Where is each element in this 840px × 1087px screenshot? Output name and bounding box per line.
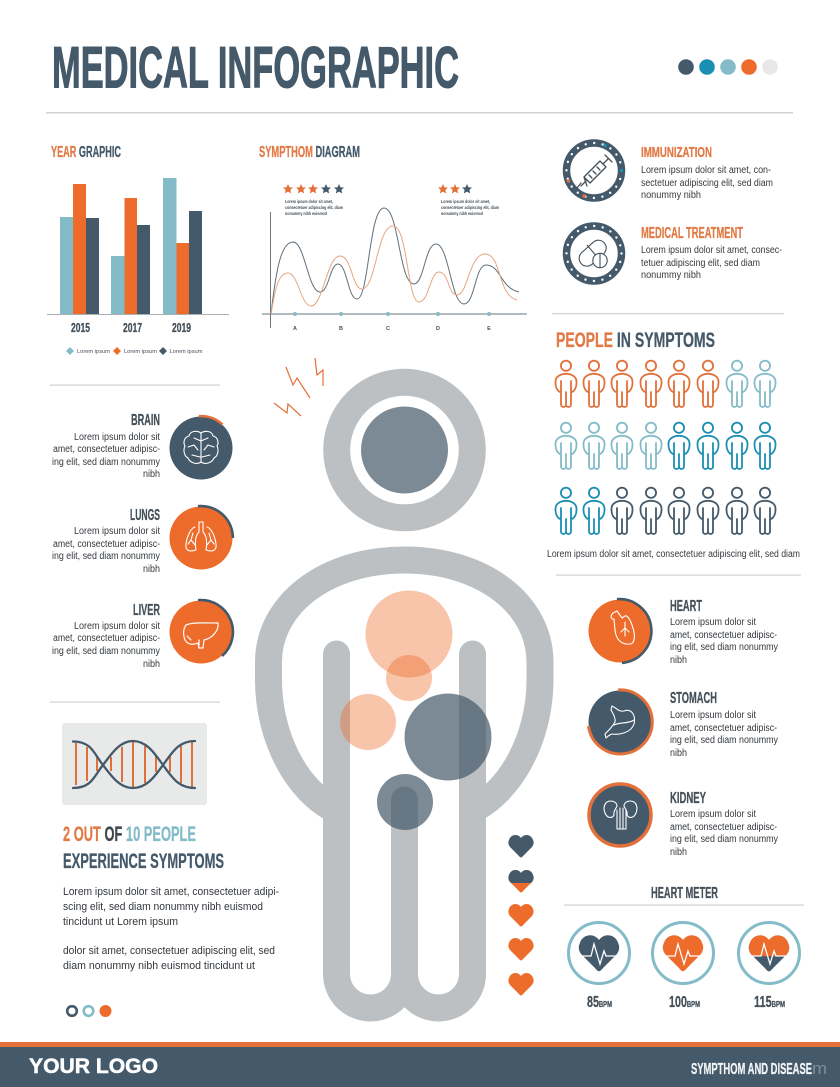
bar chart: 2019 [172, 321, 191, 335]
text: dna body [63, 886, 279, 972]
panel: liver [52, 600, 233, 670]
footer [0, 1042, 840, 1087]
readout: 115 bpm: 115BPM [754, 994, 785, 1011]
chart caption right: Lorem ipsum dolor sit amet, [441, 199, 490, 204]
gauge: 100 bpm [652, 922, 714, 984]
legend: Lorem ipsum [124, 349, 157, 355]
text: kidney: ing elit, sed diam nonummy [670, 834, 778, 845]
chart caption right: consectetuer adipiscing elit, diam [441, 205, 499, 210]
chart caption left: Lorem ipsum dolor sit amet, [285, 199, 333, 204]
line chart: D [436, 326, 440, 332]
panel: year graphic [47, 144, 229, 355]
caption: people: Lorem ipsum dolor sit amet, consectetuer adipiscing elit, sed diam [547, 549, 800, 560]
text: stomach: amet, consectetuer adipisc- [670, 723, 777, 734]
icon: pills [566, 226, 622, 281]
heading: brain: BRAIN [131, 412, 160, 429]
icon: lungs [170, 506, 233, 570]
icon: lightning bolts [274, 358, 323, 416]
chart caption left: consectetuer adipiscing elit, diam [285, 205, 343, 210]
text: kidney [670, 809, 778, 858]
text: immunization [641, 165, 773, 201]
text: kidney: Lorem ipsum dolor sit [670, 809, 756, 820]
body outline [268, 382, 540, 1008]
text: liver: nibh [143, 659, 160, 670]
text: medical treatment: Lorem ipsum dolor sit amet, consec- [641, 245, 782, 256]
title: MEDICAL INFOGRAPHIC [52, 36, 459, 100]
panel: heart meter [564, 885, 804, 1011]
human body figure [268, 382, 540, 1008]
icon: liver [170, 600, 233, 664]
text: kidney: nibh [670, 847, 687, 858]
heading: liver: LIVER [133, 602, 160, 619]
heading: stomach: STOMACH [670, 690, 717, 707]
panel: symptom diagram [259, 144, 527, 332]
text: heart: ing elit, sed diam nonummy [670, 642, 778, 653]
text: lungs: nibh [143, 564, 160, 575]
text: medical treatment [641, 245, 782, 281]
icon: stomach [588, 690, 652, 754]
pictogram row 3 [556, 488, 776, 534]
text: liver [52, 621, 160, 670]
palette dots [678, 59, 778, 75]
line chart: C [386, 326, 390, 332]
heading: heart meter: HEART METER [651, 885, 718, 902]
text: dna body: scing elit, sed diam nonummy nibh euismod [63, 901, 263, 913]
pictogram row 2 [556, 423, 776, 469]
text: lungs: amet, consectetuer adipisc- [53, 539, 160, 550]
text: dna body: diam nonummy nibh euismod tincidunt ut [63, 960, 256, 972]
line chart: E [487, 326, 491, 332]
panel: lungs [52, 506, 233, 575]
heading: 2 out of 10 people: 2 OUT OF 10 PEOPLE [63, 822, 196, 846]
heading: heart: HEART [670, 598, 702, 615]
organ markers [340, 406, 492, 830]
icon: dna helix [62, 723, 207, 805]
bar chart: 2017 [123, 321, 142, 335]
readout: 100 bpm: 100BPM [669, 994, 700, 1011]
heading: immunization: IMMUNIZATION [641, 144, 712, 161]
text: immunization: nonummy nibh [641, 190, 701, 201]
text: dna body: dolor sit amet, consectetuer adipiscing elit, sed [63, 945, 275, 957]
text: heart: amet, consectetuer adipisc- [670, 630, 777, 641]
text: stomach: ing elit, sed diam nonummy [670, 735, 778, 746]
rating stars right [438, 184, 472, 193]
text: medical treatment: nonummy nibh [641, 270, 701, 281]
heading: lungs: LUNGS [130, 507, 160, 524]
heading: kidney: KIDNEY [670, 790, 706, 807]
text: lungs [52, 526, 160, 575]
legend: Lorem ipsum [170, 349, 203, 355]
text: brain: nibh [143, 469, 160, 480]
readout: 85 bpm: 85BPM [587, 994, 612, 1011]
line chart [262, 208, 527, 332]
icon: heart organ [588, 599, 652, 663]
panel: kidney [589, 784, 778, 858]
panel: people in symptoms [547, 328, 800, 560]
heart rating column [508, 835, 534, 996]
chart caption right: nonummy nibh euismod [441, 211, 483, 216]
text: stomach [670, 710, 778, 759]
pagination dots [67, 1005, 112, 1017]
text: immunization: Lorem ipsum dolor sit amet, con- [641, 165, 771, 176]
icon: syringe [566, 143, 623, 198]
footer watermark letter: m [812, 1059, 827, 1078]
text: brain: Lorem ipsum dolor sit [74, 432, 160, 443]
text: liver: ing elit, sed diam nonummy [52, 646, 160, 657]
text: liver: Lorem ipsum dolor sit [74, 621, 160, 632]
heading: year graphic: YEAR GRAPHIC [51, 144, 121, 161]
logo text: YOUR LOGO [29, 1055, 158, 1078]
text: brain: ing elit, sed diam nonummy [52, 457, 160, 468]
legend: Lorem ipsum [77, 349, 110, 355]
heading: medical treatment: MEDICAL TREATMENT [641, 225, 743, 242]
text: brain [52, 432, 160, 480]
text: dna body: tincidunt ut Lorem ipsum [63, 916, 178, 928]
panel: dna callout [62, 723, 279, 1017]
chart caption left [285, 199, 343, 216]
text: lungs: Lorem ipsum dolor sit [74, 526, 160, 537]
icon: brain [170, 416, 232, 480]
text: immunization: sectetuer adipiscing elit, sed diam [641, 178, 773, 189]
pictogram row 1 [556, 361, 776, 407]
panel: brain [52, 412, 232, 480]
text: brain: amet, consectetuer adipisc- [53, 444, 160, 455]
legend [66, 347, 203, 355]
bar chart [47, 178, 229, 335]
text: medical treatment: tetuer adipiscing elit, sed diam [641, 258, 760, 269]
text: heart: nibh [670, 655, 687, 666]
bar chart: 2015 [71, 321, 90, 335]
line chart: A [293, 326, 297, 332]
panel: stomach [588, 690, 778, 759]
text: heart: Lorem ipsum dolor sit [670, 617, 756, 628]
icon: kidney [589, 784, 651, 846]
chart caption right [441, 199, 499, 216]
text: dna body: Lorem ipsum dolor sit amet, consectetuer adipi- [63, 886, 279, 898]
panel: heart [588, 598, 778, 666]
text: stomach: nibh [670, 748, 687, 759]
text: lungs: ing elit, sed diam nonummy [52, 551, 160, 562]
heading: experience symptoms: EXPERIENCE SYMPTOMS [63, 849, 224, 873]
heading: people in symptoms: PEOPLE IN SYMPTOMS [556, 328, 715, 352]
text: kidney: amet, consectetuer adipisc- [670, 822, 777, 833]
panel: medical treatment [566, 225, 782, 281]
text: heart [670, 617, 778, 666]
panel: immunization [566, 143, 773, 201]
gauge: 85 bpm [568, 922, 630, 984]
text: liver: amet, consectetuer adipisc- [53, 633, 160, 644]
line chart: B [339, 326, 343, 332]
heading: symptom diagram: SYMPTHOM DIAGRAM [259, 144, 360, 161]
chart caption left: nonummy nibh euismod [285, 211, 327, 216]
text: stomach: Lorem ipsum dolor sit [670, 710, 756, 721]
rating stars left [283, 184, 344, 193]
gauge: 115 bpm [738, 922, 800, 984]
